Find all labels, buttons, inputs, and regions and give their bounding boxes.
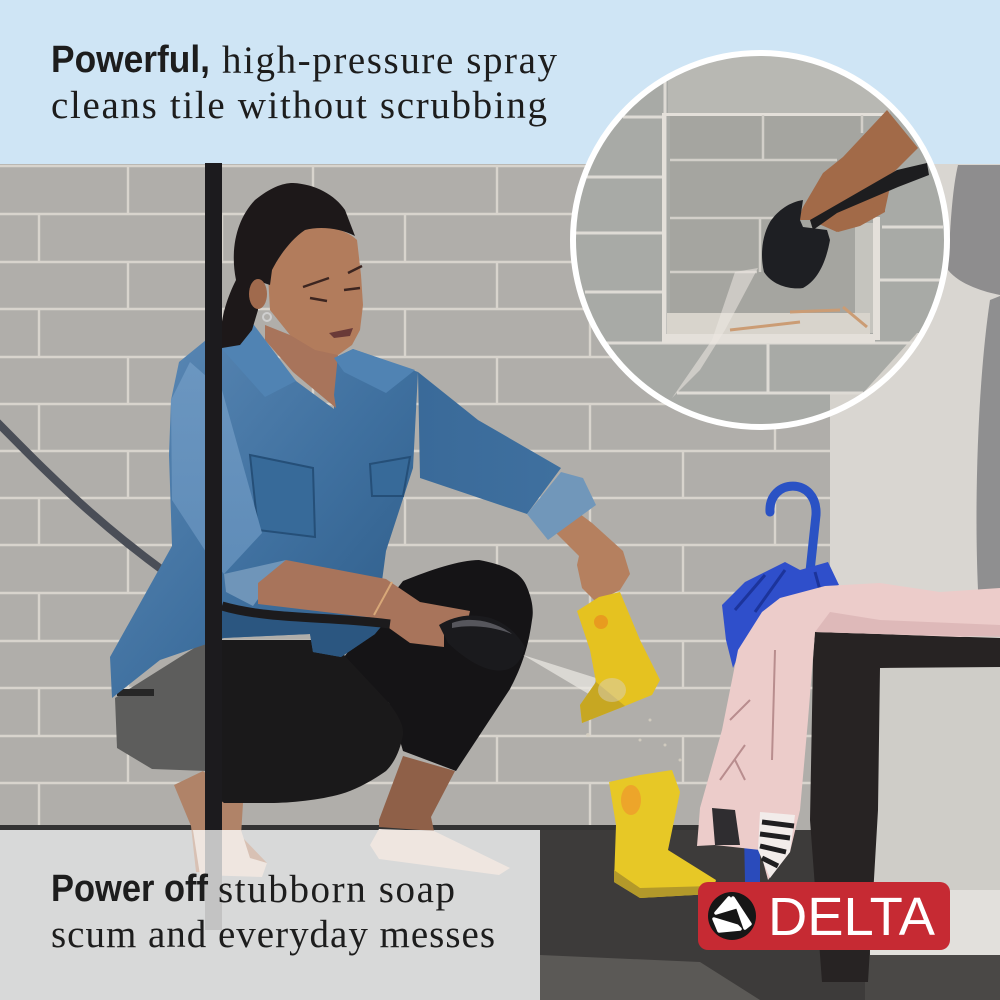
pale feet through panel bbox=[193, 829, 510, 877]
heading: high-pressure spray bbox=[222, 39, 558, 82]
inset shower head bbox=[762, 200, 830, 288]
pink jacket bbox=[697, 583, 1000, 880]
floor bbox=[0, 825, 1000, 1000]
ear bbox=[249, 279, 267, 309]
inset lower right wall bbox=[830, 333, 919, 410]
water spray bbox=[523, 655, 596, 696]
wall below bench bbox=[835, 665, 1000, 890]
right sleeve bbox=[418, 372, 561, 514]
hair bbox=[221, 183, 355, 348]
inset tile grout bbox=[576, 82, 943, 394]
front shin bbox=[379, 756, 455, 831]
hose near section bbox=[222, 606, 390, 624]
eyebrows and eyes bbox=[303, 266, 362, 301]
left forearm and hand bbox=[258, 560, 470, 647]
gray hip seen through glass bbox=[115, 640, 207, 771]
bench frame bbox=[810, 632, 1000, 982]
face bbox=[268, 225, 363, 355]
heading: cleans tile without scrubbing bbox=[51, 84, 547, 127]
right forearm and hand bbox=[551, 505, 630, 602]
heading bbox=[51, 39, 558, 127]
bottom caption: scum and everyday messes bbox=[51, 913, 495, 956]
baseboard bbox=[870, 890, 1000, 955]
towel on right wall bbox=[948, 165, 1000, 590]
bottom caption: stubborn soap bbox=[218, 868, 455, 911]
earring bbox=[263, 313, 271, 321]
shirt lower shadow bbox=[222, 605, 385, 657]
person bbox=[110, 183, 630, 875]
neck bbox=[265, 325, 338, 408]
inset niche shelf bbox=[667, 313, 870, 334]
water splash bbox=[586, 678, 682, 762]
lips bbox=[329, 328, 353, 338]
shirt body bbox=[110, 318, 418, 698]
pale pole through panel bbox=[205, 830, 222, 930]
shower head in hand bbox=[439, 615, 525, 671]
glass shower pole bbox=[205, 163, 222, 831]
inset niche back bbox=[670, 116, 863, 334]
hip pocket tab bbox=[117, 689, 154, 696]
bench bbox=[810, 632, 1000, 982]
heading: Powerful, bbox=[51, 39, 210, 81]
inset niche frame bbox=[662, 113, 890, 343]
umbrella bbox=[722, 486, 839, 882]
bottom caption bbox=[51, 868, 495, 956]
inset fingers front bbox=[838, 210, 885, 232]
circular inset photo bbox=[570, 50, 950, 430]
hose far section bbox=[0, 420, 205, 600]
yellow boot on floor bbox=[609, 770, 716, 898]
Delta logo bbox=[698, 882, 950, 950]
inset top tile bbox=[668, 56, 890, 113]
rust stains bbox=[730, 307, 867, 330]
bracelet bbox=[374, 582, 392, 615]
top banner bbox=[0, 0, 1000, 164]
back foot bbox=[174, 771, 267, 875]
Delta logo: DELTA bbox=[768, 887, 935, 947]
rolled left cuff bbox=[224, 560, 286, 606]
inset shower handle bbox=[810, 163, 929, 230]
tile wall bbox=[0, 166, 830, 826]
near thigh bbox=[207, 640, 403, 803]
collar bbox=[222, 317, 415, 397]
inset hand bbox=[798, 110, 918, 232]
rolled right cuff bbox=[527, 472, 596, 540]
inset niche side bbox=[855, 223, 873, 333]
inset niche grout bbox=[670, 115, 862, 272]
inset spray bbox=[672, 268, 758, 398]
shirt pockets bbox=[250, 455, 410, 537]
far leg bbox=[334, 560, 533, 771]
inset tile wall bbox=[577, 80, 944, 424]
bottom translucent text panel bbox=[0, 830, 540, 1000]
bottom caption: Power off bbox=[51, 868, 208, 910]
left sleeve bbox=[171, 362, 262, 574]
yellow boot held bbox=[577, 592, 660, 723]
